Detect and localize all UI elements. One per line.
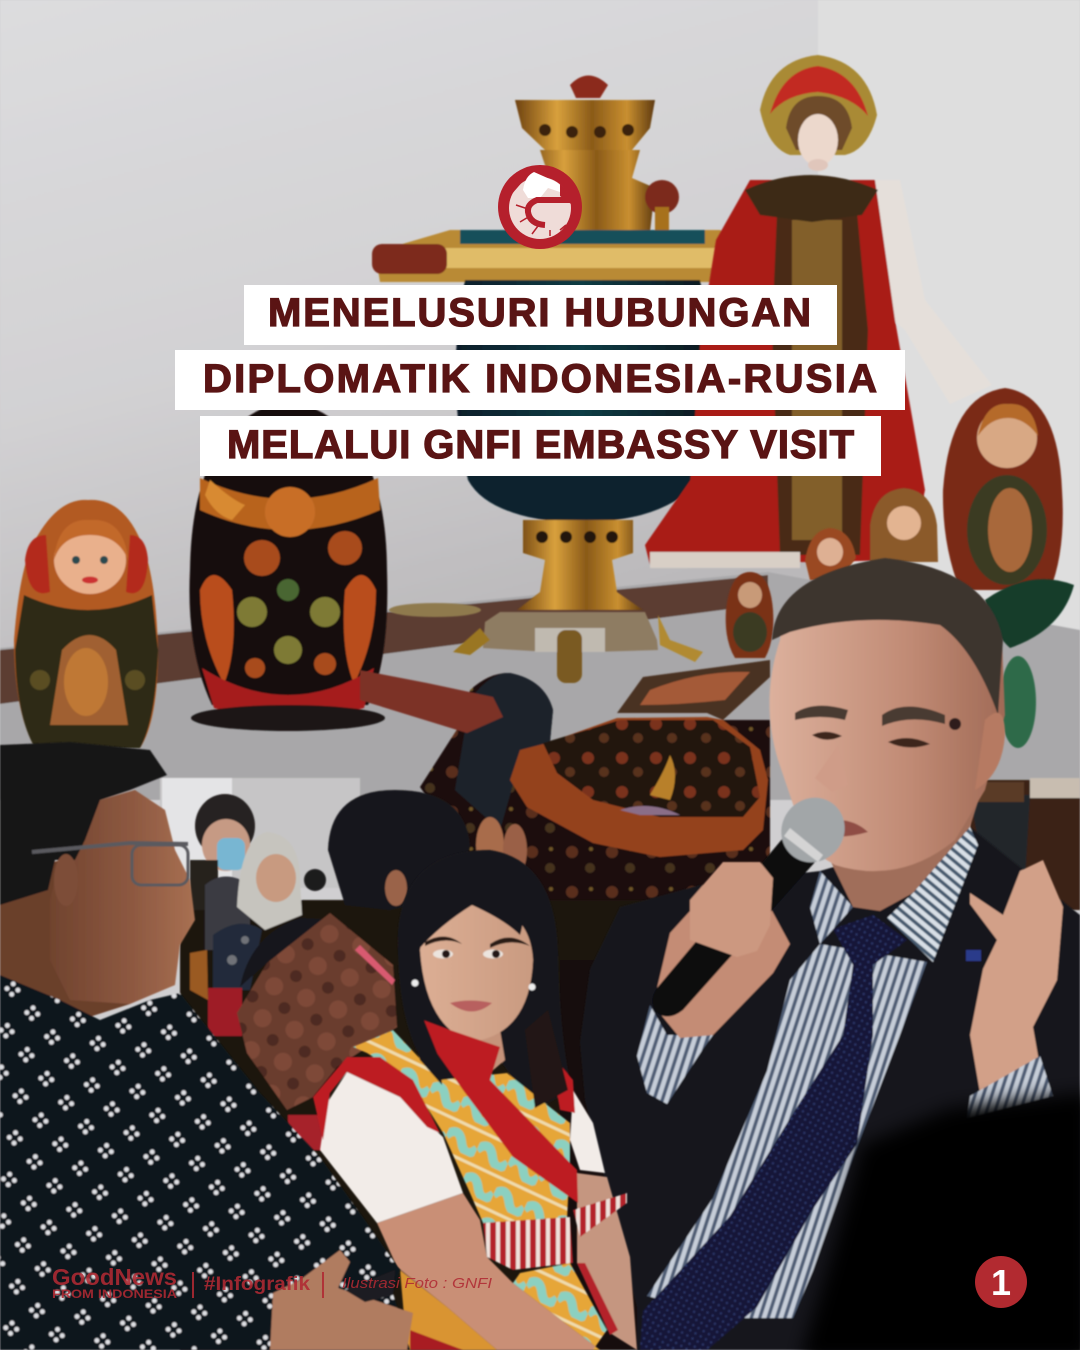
- page number badge: 1: [991, 1262, 1011, 1303]
- right arm: [577, 1173, 637, 1350]
- striped belt and bow: [483, 1217, 573, 1270]
- photo: gold and teal samovar: [372, 76, 762, 683]
- lapel pin: [966, 950, 981, 961]
- brand: GoodNews from Indonesia: [52, 1264, 177, 1301]
- title: three white banner lines: [175, 285, 905, 476]
- hair: [0, 742, 167, 905]
- photo: small nesting doll left: [14, 500, 158, 748]
- face and hair: [769, 558, 1005, 911]
- brand: GoodNews from Indonesia: FROM INDONESIA: [52, 1289, 177, 1301]
- hashtag: #Infografik: [204, 1274, 310, 1295]
- photo: woman in batik and red scarf: [313, 850, 637, 1350]
- patterned shirt: [0, 975, 410, 1350]
- navy tie: [640, 915, 907, 1350]
- upper arm: [377, 1193, 600, 1350]
- batik sash: [353, 1030, 570, 1223]
- photo: doll with red dress and kokoshnik: [645, 55, 992, 568]
- shirt collar: [887, 827, 978, 962]
- face: [50, 790, 195, 1004]
- neck: [0, 860, 130, 1020]
- palm behind microphone: [653, 862, 790, 1038]
- neck and face: [412, 879, 536, 1090]
- lower batik skirt: [513, 1263, 607, 1350]
- title line 3: [200, 416, 881, 476]
- striped shirt: [647, 944, 927, 1318]
- title line 2: [175, 350, 905, 410]
- footer: brand, hashtag and photo credit: [52, 1264, 492, 1301]
- page number badge: [975, 1256, 1027, 1308]
- raised hand: [970, 860, 1063, 1093]
- photo: large nesting doll: [189, 400, 387, 731]
- photo: small nesting dolls right: [726, 388, 1063, 658]
- red shoulder: [313, 1057, 440, 1140]
- divider: [322, 1272, 324, 1298]
- microphone: [652, 785, 857, 1017]
- hair back: [398, 850, 572, 1110]
- photo: dark blurred foreground shoulder: [800, 1092, 1080, 1350]
- red scarf: [423, 1020, 578, 1203]
- suit jacket: [580, 827, 1080, 1350]
- hair strands over shoulders: [405, 1000, 442, 1085]
- photo: man with glasses and patterned black shirt: [0, 742, 413, 1350]
- photo: painted wooden ladle: [360, 660, 770, 960]
- white sleeves: [320, 1072, 463, 1223]
- brand: GoodNews from Indonesia: GoodNews: [52, 1264, 177, 1290]
- title line 3: MELALUI GNFI EMBASSY VISIT: [227, 423, 854, 467]
- photo credit: Ilustrasi Foto : GNFI: [342, 1275, 492, 1292]
- glasses: [32, 843, 188, 852]
- shirt cuff right: [967, 1056, 1053, 1118]
- divider: [192, 1272, 194, 1298]
- photo: seated audience in background: [180, 790, 660, 1350]
- fingers over microphone: [690, 862, 773, 957]
- photo: ambassador with microphone: [580, 558, 1080, 1350]
- title line 1: MENELUSURI HUBUNGAN: [268, 291, 811, 335]
- clasped hand: [270, 1250, 413, 1350]
- shirt cuff left: [637, 1005, 713, 1104]
- title line 1: [244, 285, 837, 345]
- photo: green leaf and vase on right edge: [970, 579, 1080, 910]
- logo: GNFI red roundel: [498, 165, 582, 249]
- title line 2: DIPLOMATIK INDONESIA-RUSIA: [203, 357, 877, 401]
